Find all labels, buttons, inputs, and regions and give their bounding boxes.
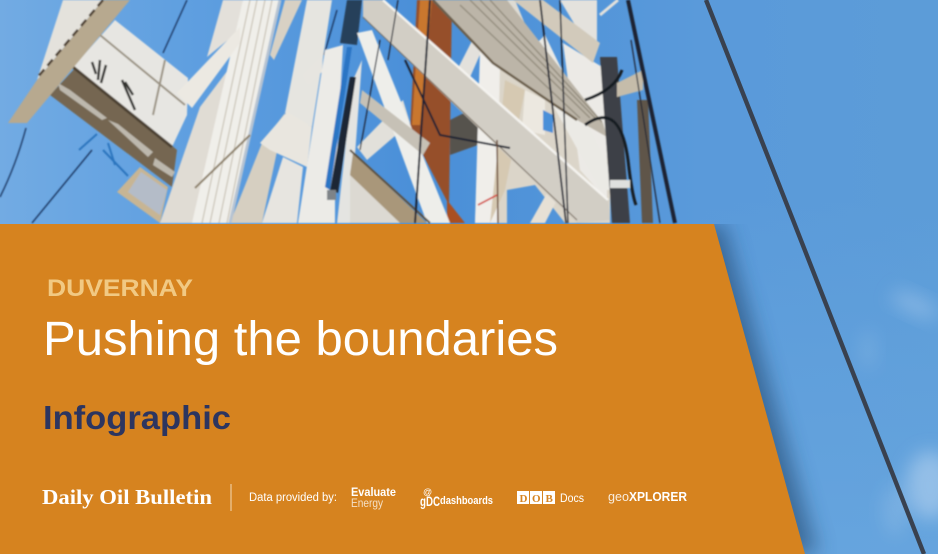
footer divider <box>230 484 232 511</box>
platform: beam <box>37 0 103 80</box>
logo: Evaluate Energy <box>351 487 396 510</box>
data provided by label: Data provided by: <box>249 492 337 504</box>
center white columns <box>285 0 332 127</box>
rust column <box>410 0 452 205</box>
main diagonal beam <box>363 0 610 223</box>
logo: gDC dashboards: @ <box>423 487 432 497</box>
logo: DOB Docs <box>517 491 584 505</box>
left white lattice <box>160 50 243 223</box>
photo: long braided cable <box>706 0 924 554</box>
right lattice backing <box>475 40 610 223</box>
platform: white panel <box>73 20 188 147</box>
white diagonal braces <box>357 30 450 223</box>
center background beams <box>357 100 410 160</box>
photo: drilling rig tower <box>0 0 675 223</box>
logo: DOB Docs: D <box>520 493 528 505</box>
orange panel shadow <box>714 224 825 554</box>
thin guy wires left <box>0 0 337 223</box>
logo: Evaluate Energy: Energy <box>351 496 383 510</box>
logo: gDC dashboards: gDC <box>420 493 440 509</box>
title: Pushing the boundaries <box>43 313 558 366</box>
right white columns and hoses <box>298 45 343 223</box>
logo: gDC dashboards <box>420 487 493 509</box>
platform: underside <box>50 65 177 187</box>
logo: DOB Docs: B <box>546 493 554 505</box>
eyebrow: DUVERNAY: DUVERNAY <box>47 275 193 302</box>
chains and rig cables <box>360 0 568 223</box>
orange title panel <box>0 224 805 554</box>
logo: DOB Docs: Docs <box>560 491 584 505</box>
logo: Evaluate Energy: Evaluate <box>351 487 396 499</box>
right rig cable <box>628 0 675 223</box>
logo: DOB Docs: O <box>532 493 541 505</box>
logo: geoXPLORER: XPLORER <box>629 490 687 504</box>
subtitle: Infographic: Infographic <box>43 399 231 436</box>
grooved diagonal beam <box>433 0 607 137</box>
platform: lower deck <box>117 167 168 223</box>
logo: geoXPLORER: geo <box>608 490 629 504</box>
lower left background fill behind braces <box>350 170 415 223</box>
logo: Daily Oil Bulletin: Daily Oil Bulletin <box>42 485 212 509</box>
right dark column <box>600 57 630 223</box>
logo: gDC dashboards: dashboards <box>440 495 493 507</box>
upper right beam <box>513 0 600 63</box>
